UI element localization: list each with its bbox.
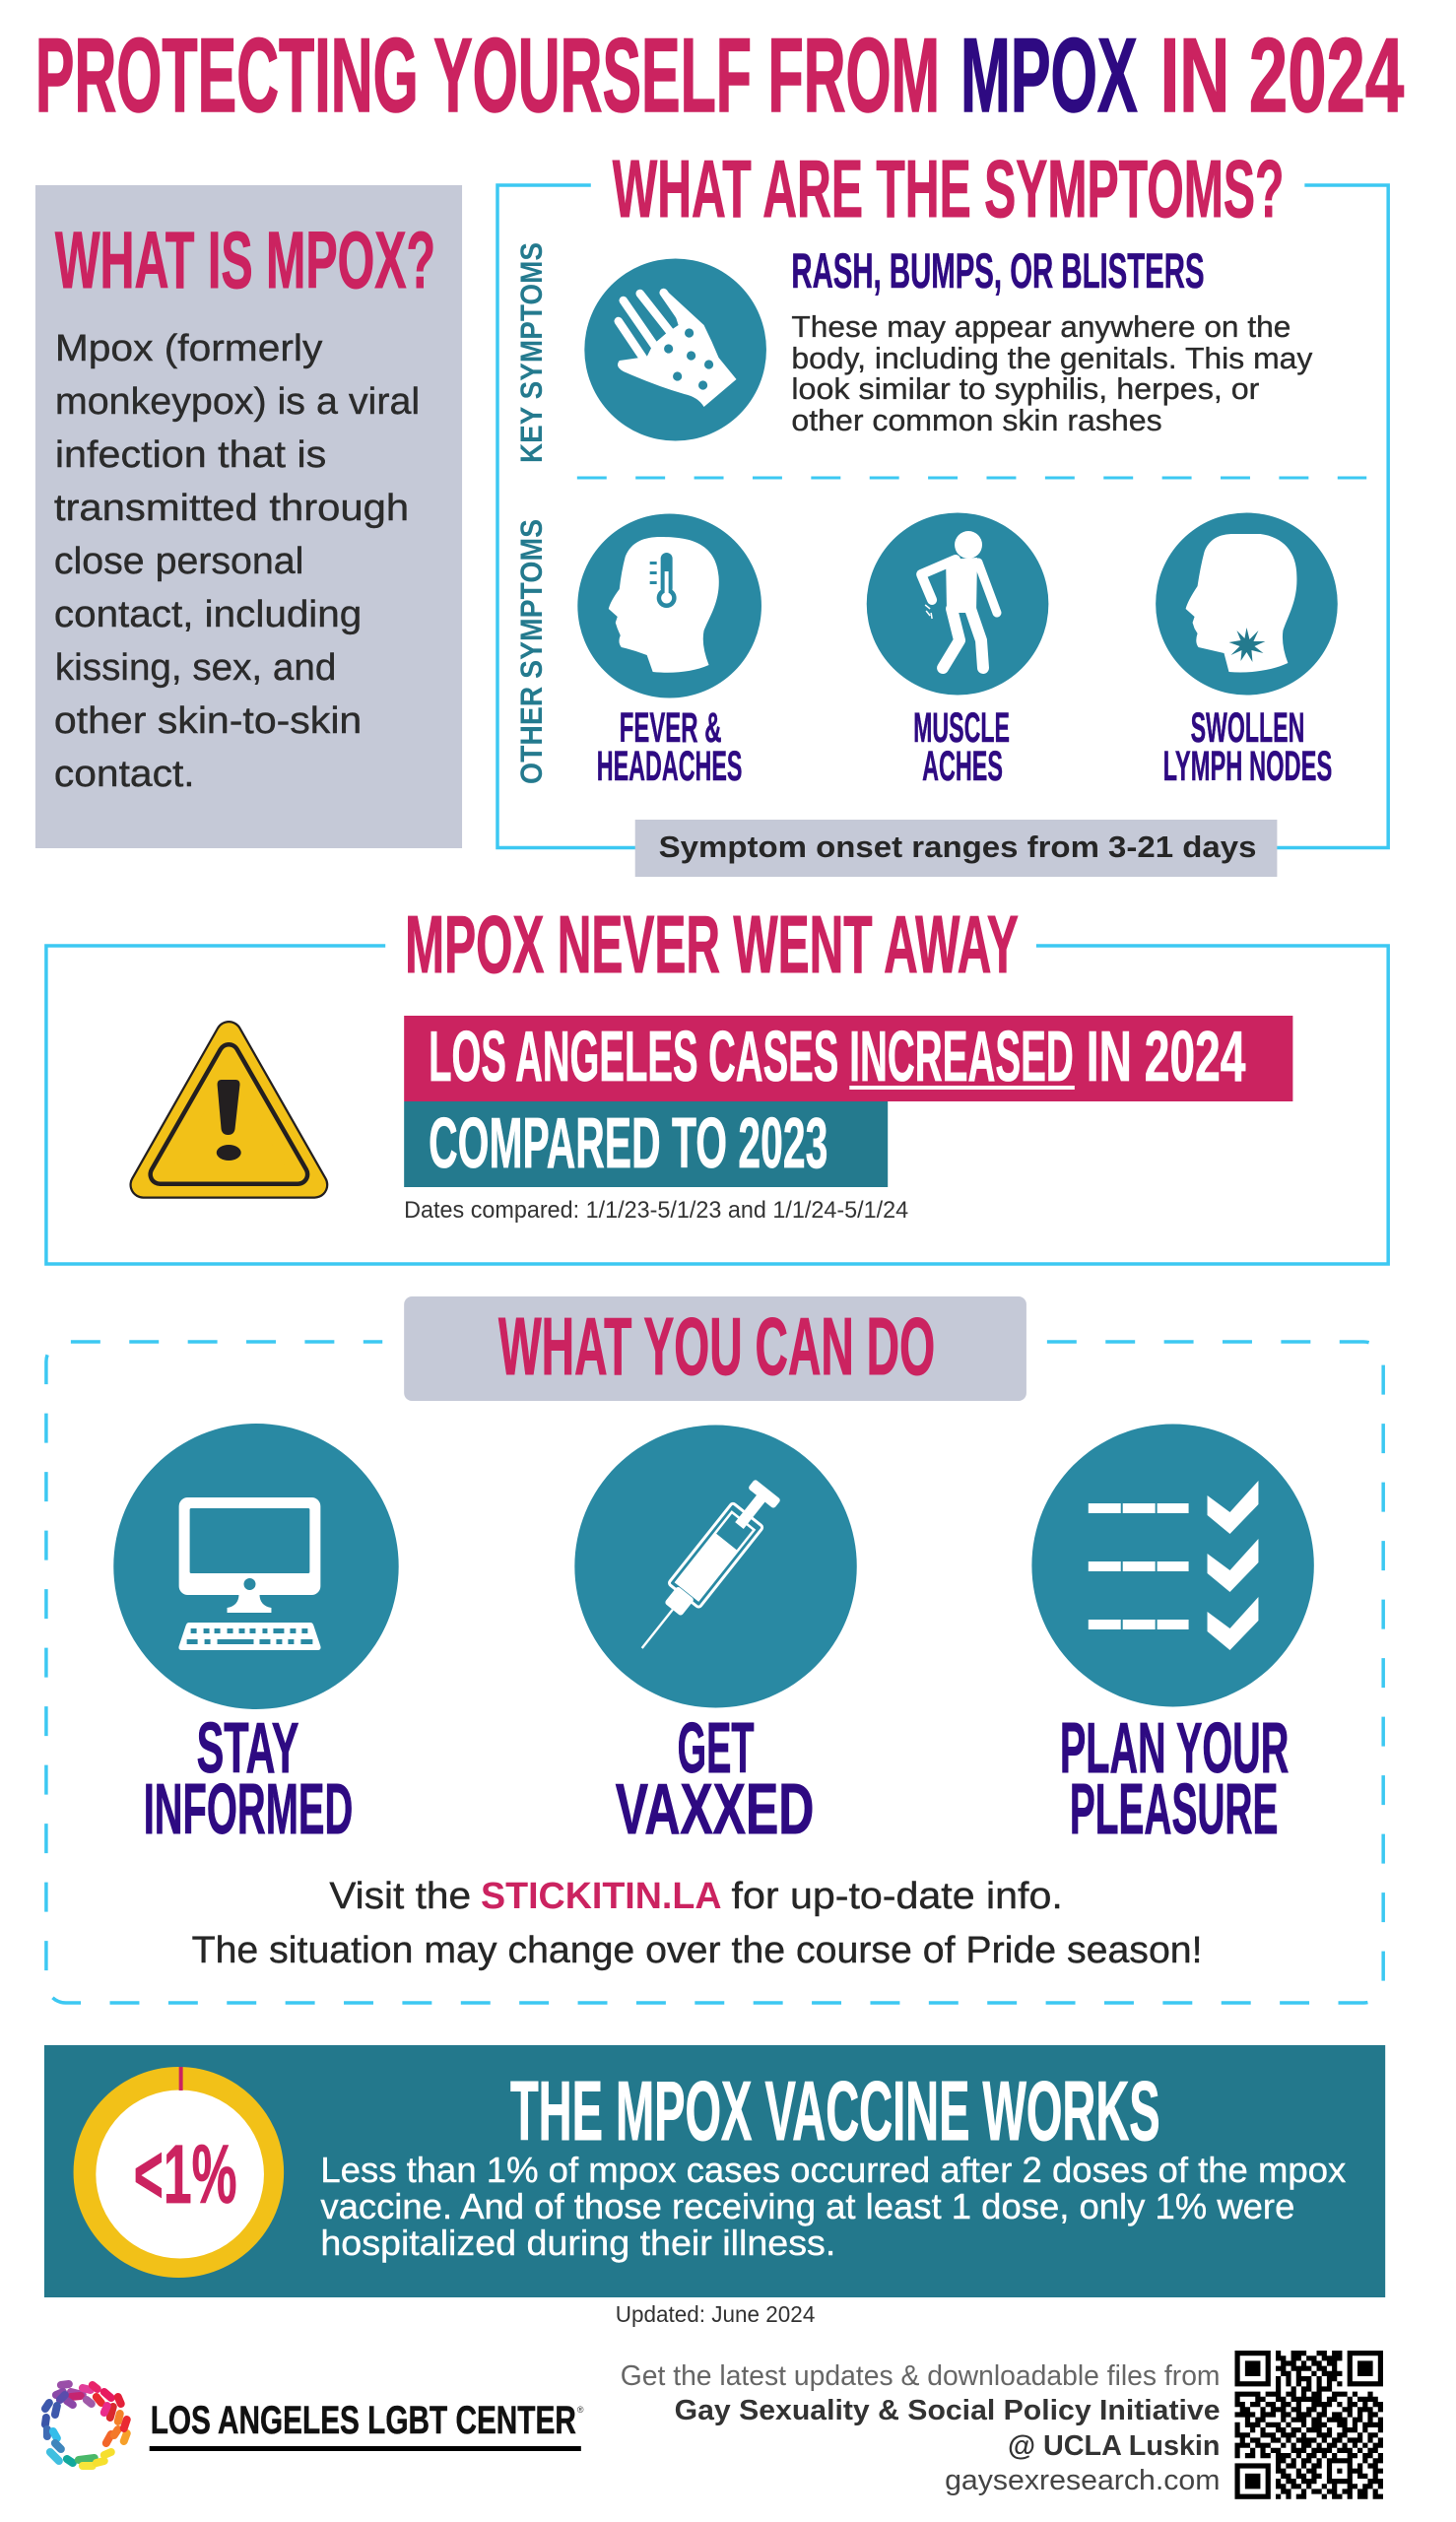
text block: definition: monkeypox) is a viral: [55, 381, 420, 423]
text block: visit stickitin.la: STICKITIN.LA: [481, 1876, 722, 1917]
text: updated date: Updated: June 2024: [616, 2301, 816, 2327]
label: fever and headaches: [597, 704, 742, 790]
callout: compared to 2023: [404, 1101, 888, 1187]
text block: footer credits: Gay Sexuality & Social Policy Initiative: [675, 2395, 1221, 2426]
label: get vaxxed: [616, 1709, 814, 1849]
icon: muscle aches: [867, 512, 1048, 696]
text block: footer credits: [621, 2360, 1221, 2496]
text block: definition: close personal: [54, 541, 303, 582]
callout: symptom onset: Symptom onset ranges from 3-21 days: [659, 830, 1256, 864]
chart: less than 1 percent donut: <1%: [134, 2128, 237, 2221]
label: swollen lymph nodes: [1163, 704, 1332, 790]
registered mark: ®: [577, 2405, 584, 2415]
text block: definition: infection that is: [55, 434, 326, 476]
label: muscle aches: [913, 704, 1010, 790]
label: swollen lymph nodes: SWOLLEN: [1191, 704, 1304, 752]
label: get vaxxed: VAXXED: [616, 1770, 814, 1849]
text block: visit stickitin.la: for up-to-date info.: [732, 1876, 1063, 1917]
text block: definition: other skin-to-skin: [54, 700, 362, 742]
text block: rash description: [791, 309, 1313, 437]
text block: rash description: look similar to syphilis, herpes, or: [791, 371, 1259, 406]
text block: rash description: other common skin rashes: [791, 403, 1162, 437]
text block: definition: transmitted through: [54, 488, 409, 529]
icon: computer: [113, 1424, 399, 1709]
callout: compared to 2023: COMPARED TO 2023: [429, 1104, 827, 1183]
text block: definition: contact, including: [54, 594, 362, 635]
logo wordmark: LOS ANGELES LGBT CENTER: [151, 2399, 576, 2442]
text block: definition: contact.: [54, 754, 195, 795]
heading: what you can do: [404, 1296, 1026, 1401]
label: get vaxxed: GET: [678, 1709, 754, 1788]
callout: cases increased: IN 2024: [1087, 1018, 1245, 1096]
text block: visit stickitin.la: [192, 1876, 1203, 1971]
callout: cases increased: INCREASED: [849, 1018, 1074, 1096]
icon: syringe: [574, 1425, 857, 1708]
label: stay informed: STAY: [197, 1709, 298, 1788]
label: muscle aches: ACHES: [922, 743, 1003, 790]
icon: fever and headache: [577, 514, 761, 697]
text block: rash description: These may appear anywhere on the: [791, 309, 1291, 344]
callout: cases increased: LOS ANGELES CASES: [429, 1018, 838, 1096]
label: key symptoms: KEY SYMPTOMS: [513, 242, 549, 463]
label: stay informed: [144, 1709, 353, 1849]
panel: what you can do: [46, 1296, 1383, 2003]
logo: los angeles lgbt center: [45, 2384, 584, 2466]
icon: rash on hand: [584, 258, 766, 441]
text block: definition: kissing, sex, and: [55, 647, 336, 689]
label: plan your pleasure: [1060, 1709, 1289, 1849]
heading: what you can do: WHAT YOU CAN DO: [498, 1300, 935, 1392]
qr code: [1234, 2354, 1383, 2496]
panel: symptoms: [497, 143, 1388, 877]
text block: footer credits: @ UCLA Luskin: [1008, 2430, 1221, 2462]
label: fever and headaches: FEVER &: [620, 704, 722, 752]
text block: footer credits: Get the latest updates & downloadable files from: [621, 2360, 1221, 2392]
icon: checklist: [1031, 1425, 1314, 1706]
text block: vaccine stats: vaccine. And of those receiving at least 1 dose, only 1% were: [320, 2186, 1294, 2226]
heading: what is mpox: WHAT IS MPOX?: [55, 216, 435, 305]
text: dates compared: Dates compared: 1/1/23-5/1/23 and 1/1/24-5/1/24: [404, 1197, 908, 1224]
text block: vaccine stats: Less than 1% of mpox cases occurred after 2 doses of the mpox: [320, 2150, 1346, 2190]
label: other symptoms: OTHER SYMPTOMS: [513, 519, 549, 784]
callout: symptom onset: [635, 820, 1277, 877]
panel: what is mpox: [35, 185, 462, 848]
text block: vaccine stats: [320, 2150, 1346, 2263]
heading: mpox never went away: MPOX NEVER WENT AWAY: [405, 898, 1019, 990]
text block: visit stickitin.la: Visit the: [329, 1876, 471, 1917]
text block: rash description: body, including the genitals. This may: [791, 341, 1313, 375]
icon: warning triangle: [143, 1034, 314, 1185]
chart: less than 1 percent donut: [74, 2067, 284, 2278]
label: muscle aches: MUSCLE: [913, 704, 1010, 752]
text block: definition: [54, 328, 420, 795]
text block: vaccine stats: hospitalized during their illness.: [320, 2223, 835, 2263]
panel: the mpox vaccine works: [44, 2045, 1385, 2297]
text block: visit stickitin.la: The situation may change over the course of Pride season!: [192, 1930, 1203, 1971]
panel: mpox never went away: [46, 898, 1388, 1264]
title: MPOX: [960, 16, 1138, 134]
text block: definition: Mpox (formerly: [55, 328, 322, 369]
label: fever and headaches: HEADACHES: [597, 743, 742, 790]
label: stay informed: INFORMED: [144, 1770, 353, 1849]
icon: swollen lymph nodes: [1156, 512, 1338, 696]
label: plan your pleasure: PLEASURE: [1070, 1770, 1278, 1849]
icon: rainbow ring: [45, 2384, 127, 2466]
text block: footer credits: gaysexresearch.com: [945, 2465, 1221, 2496]
